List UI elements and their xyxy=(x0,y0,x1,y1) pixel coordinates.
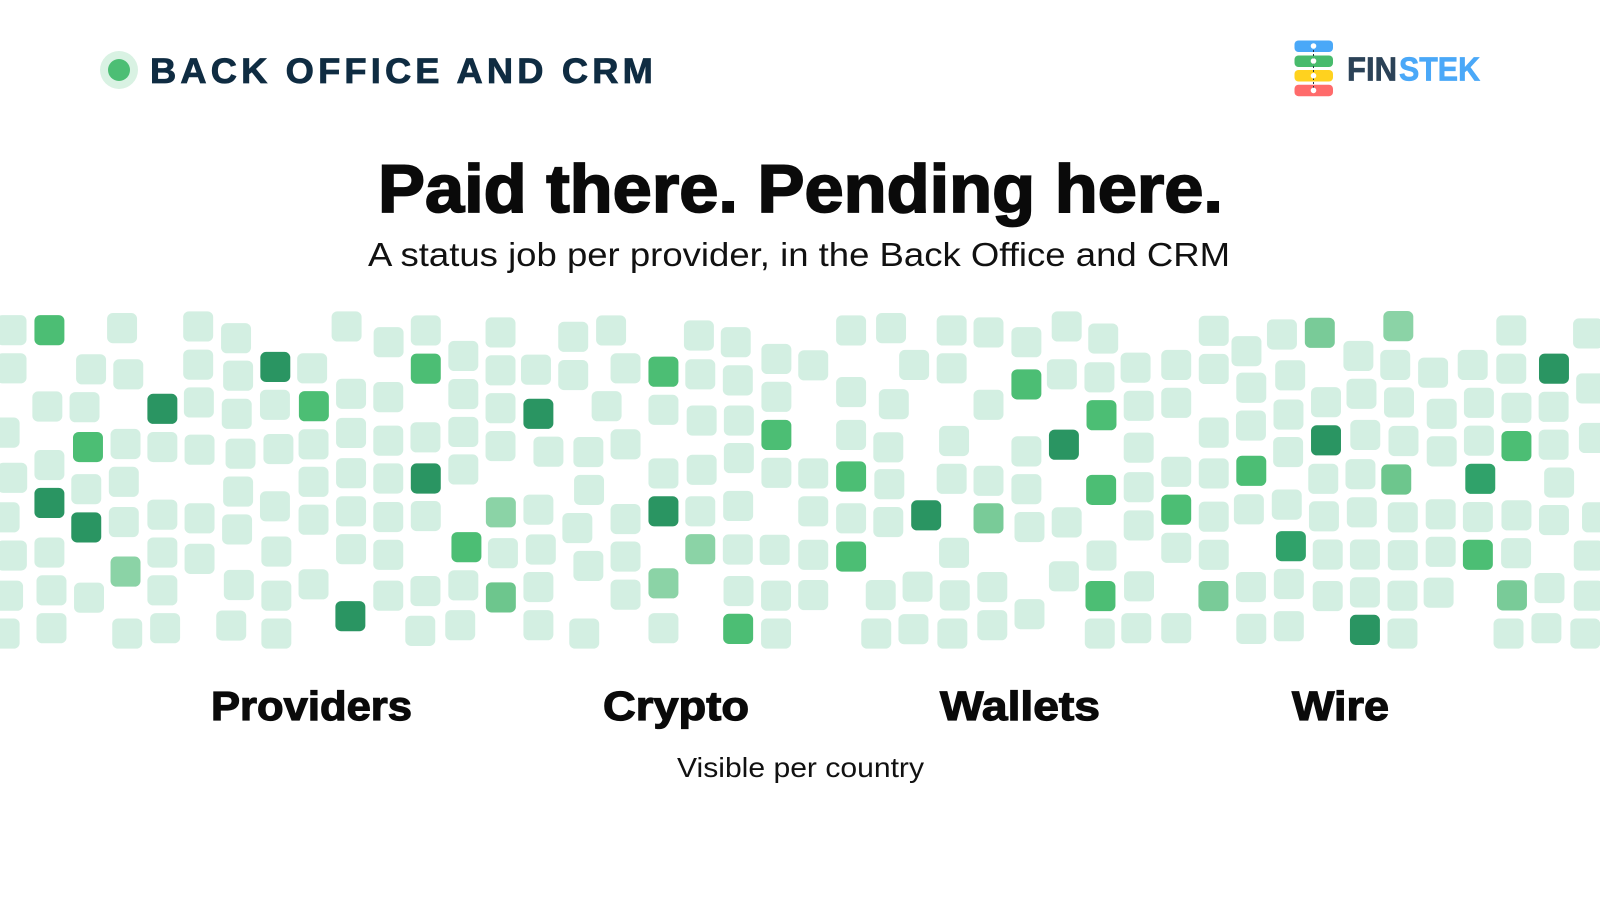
label: Crypto: Crypto xyxy=(603,683,749,729)
icon: stacked colour bars xyxy=(1294,40,1333,96)
title: Paid there. Pending here. xyxy=(378,151,1223,227)
caption: Visible per country xyxy=(677,752,924,783)
logo: Finstek xyxy=(1294,40,1480,96)
subtitle: A status job per provider, in the Back Office and CRM xyxy=(368,236,1230,273)
label: Wallets: Wallets xyxy=(940,683,1100,729)
icon: status dot xyxy=(100,51,138,89)
header: section label xyxy=(100,51,657,91)
status tile wall xyxy=(0,311,1600,649)
logo wordmark: STEK xyxy=(1399,50,1480,88)
label: Wire: Wire xyxy=(1292,683,1389,729)
tiles: right section xyxy=(1084,311,1600,649)
tiles: centre section xyxy=(533,311,1082,649)
tiles: left section xyxy=(0,311,556,649)
section label text: BACK OFFICE AND CRM xyxy=(150,52,657,91)
logo wordmark: FIN xyxy=(1347,50,1397,88)
label: Providers: Providers xyxy=(211,683,412,729)
category labels xyxy=(211,683,1389,729)
